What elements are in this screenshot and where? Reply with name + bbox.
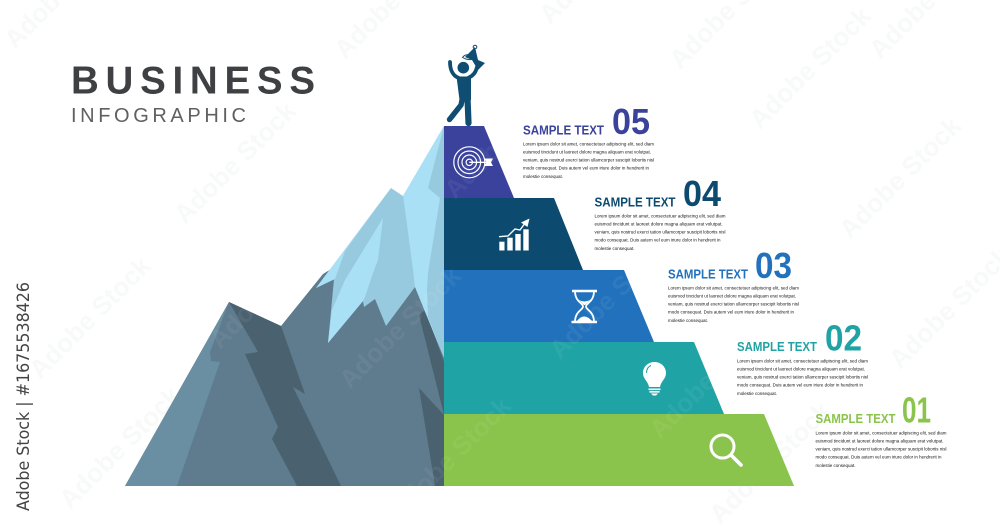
right dark strip	[419, 310, 444, 415]
text block 03: modo consequat. Duis autem vel eum iriure dolor in hendrerit in	[668, 310, 794, 316]
infographic canvas: Adobe Stock	[703, 395, 837, 529]
icon: magnifier	[711, 435, 741, 465]
infographic canvas: Adobe Stock	[53, 380, 187, 514]
snow cap	[316, 126, 444, 358]
infographic canvas: Adobe Stock	[333, 260, 467, 394]
title: BUSINESS	[71, 60, 315, 102]
pyramid step 03	[444, 270, 654, 342]
text block 03: molestie consequat.	[668, 318, 708, 324]
text block 01: Lorem ipsum dolor sit amet, consectetuer adipiscing elit, sed diam	[816, 430, 946, 436]
infographic canvas: Adobe Stock	[383, 390, 517, 524]
text block 03: 03	[755, 245, 792, 286]
text block 04: 04	[683, 173, 722, 214]
text block 04: molestie consequat.	[594, 246, 634, 252]
text block 02: 02	[825, 318, 862, 358]
left ridge light face	[125, 302, 229, 486]
text block 01: veniam, quis nostrud exerci tation ullamcorper suscipit lobortis nisl	[816, 446, 946, 452]
text block 05: Lorem ipsum dolor sit amet, consectetuer adipiscing elit, sed diam	[523, 142, 654, 148]
text block 04: SAMPLE TEXT	[594, 194, 676, 210]
infographic canvas: Adobe Stock	[543, 230, 677, 364]
text block 03: Lorem ipsum dolor sit amet, consectetuer adipiscing elit, sed diam	[668, 286, 799, 292]
text block 05: modo consequat. Duis autem vel eum iriure dolor in hendrerit in	[523, 166, 649, 172]
text block 03: veniam, quis nostrud exerci tation ullamcorper suscipit lobortis nisl	[668, 302, 799, 308]
pyramid step 04	[444, 198, 583, 270]
text block 03: euismod tincidunt ut laoreet dolore magna aliquam erat volutpat.	[668, 294, 796, 300]
text block 05: molestie consequat.	[523, 174, 563, 180]
icon: target	[454, 147, 493, 178]
text block 01: modo consequat. Duis autem vel eum iriure dolor in hendrerit in	[816, 454, 942, 460]
snow centre highlight	[328, 218, 383, 343]
text block 01	[816, 390, 946, 469]
infographic canvas: Adobe Stock	[438, 70, 572, 204]
infographic canvas: Adobe Stock	[23, 250, 157, 384]
infographic canvas: Adobe Stock	[833, 110, 967, 244]
text block 04: modo consequat. Duis autem vel eum iriure dolor in hendrerit in	[594, 238, 721, 244]
text block 04	[594, 173, 726, 252]
text block 03: SAMPLE TEXT	[668, 266, 748, 282]
text block 01: 01	[902, 390, 931, 430]
mountain illustration	[125, 126, 444, 486]
icon: light bulb	[643, 362, 666, 396]
text block 01: molestie consequat.	[816, 463, 856, 469]
text block 01: SAMPLE TEXT	[816, 411, 896, 426]
text block 05	[523, 101, 654, 180]
text block 03	[668, 245, 799, 324]
infographic canvas: Adobe Stock	[203, 220, 337, 354]
text block 04: veniam, quis nostrud exerci tation ullamcorper suscipit lobortis nisl	[594, 230, 726, 236]
pyramid step 05	[444, 126, 514, 198]
text block 02: veniam, quis nostrud exerci tation ullamcorper suscipit lobortis nisl	[737, 374, 868, 380]
snow right highlight	[403, 126, 444, 358]
right dark wedge	[419, 388, 444, 486]
text block 04: euismod tincidunt ut laoreet dolore magna aliquam erat volutpat.	[594, 222, 722, 228]
text block 02	[737, 318, 868, 397]
pyramid step 01	[444, 414, 794, 486]
text block 02: SAMPLE TEXT	[737, 339, 817, 354]
text block 01: euismod tincidunt ut laoreet dolore magna aliquam erat volutpat.	[816, 438, 944, 444]
infographic canvas: Adobe Stock	[743, 0, 877, 134]
text block 02: modo consequat. Duis autem vel eum iriure dolor in hendrerit in	[737, 382, 863, 388]
mountain rock body	[125, 200, 444, 486]
text block 05: 05	[612, 101, 650, 142]
icon: person holding trophy	[450, 45, 485, 123]
dark crevasse	[229, 302, 341, 486]
infographic canvas: Adobe Stock	[168, 95, 302, 229]
title	[71, 60, 315, 127]
text block 05: SAMPLE TEXT	[523, 122, 604, 138]
infographic canvas: Adobe Stock	[643, 310, 777, 444]
snow outer band	[316, 188, 391, 288]
text block 02: molestie consequat.	[737, 391, 777, 397]
title: INFOGRAPHIC	[71, 105, 246, 127]
text block 04: Lorem ipsum dolor sit amet, consectetuer adipiscing elit, sed diam	[594, 214, 726, 220]
text block 05: euismod tincidunt ut laoreet dolore magna aliquam erat volutpat.	[523, 150, 651, 156]
text block 05: veniam, quis nostrud exerci tation ullamcorper suscipit lobortis nisl	[523, 158, 654, 164]
stock id side label: Adobe Stock | #1675538426	[14, 282, 34, 511]
trophy	[465, 47, 485, 70]
text block 02: Lorem ipsum dolor sit amet, consectetuer adipiscing elit, sed diam	[737, 358, 868, 364]
icon: hourglass	[572, 291, 597, 322]
icon: growth chart	[499, 218, 530, 250]
pyramid step 02	[444, 342, 724, 414]
text block 02: euismod tincidunt ut laoreet dolore magna aliquam erat volutpat.	[737, 366, 865, 372]
